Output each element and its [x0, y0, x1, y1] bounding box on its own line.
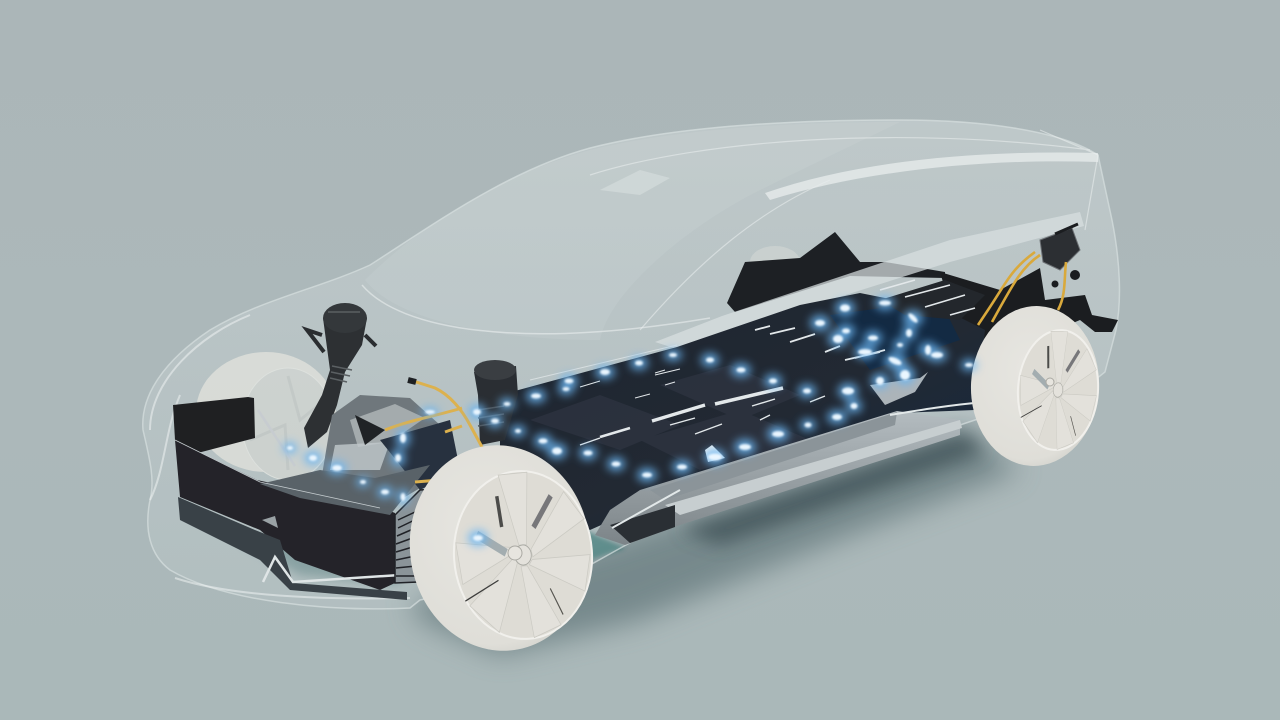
rear wheel	[967, 303, 1103, 469]
side window lines	[590, 130, 1098, 330]
belt line band	[655, 212, 1084, 349]
front strut mount	[474, 360, 518, 445]
battery platform	[500, 280, 985, 530]
glass car body	[143, 120, 1119, 609]
rear motor highlights	[870, 372, 928, 405]
windshield	[365, 122, 900, 340]
front fender swoop	[150, 315, 410, 598]
front wheel	[397, 433, 603, 663]
front battery box	[173, 397, 255, 455]
rear seat mount	[727, 232, 945, 312]
far rear wheel hint	[750, 246, 800, 278]
battery white markings	[530, 280, 975, 445]
far front wheel	[196, 352, 336, 480]
roof highlight	[765, 152, 1098, 200]
side sill	[595, 402, 985, 545]
mirror	[600, 170, 670, 195]
ground shadow	[240, 425, 1020, 655]
rear subframe	[940, 268, 1118, 360]
hood line	[362, 285, 710, 334]
front suspension strut	[304, 303, 376, 448]
blue battery cell lights: bright cores	[287, 300, 973, 541]
front orange cables	[385, 380, 482, 482]
front crash beam	[175, 410, 430, 600]
radiator fins	[395, 488, 448, 583]
rear orange cables	[978, 252, 1066, 325]
rear electronics box	[1040, 224, 1080, 270]
blue battery cell lights: glow	[283, 296, 977, 546]
front drive unit	[322, 395, 460, 500]
